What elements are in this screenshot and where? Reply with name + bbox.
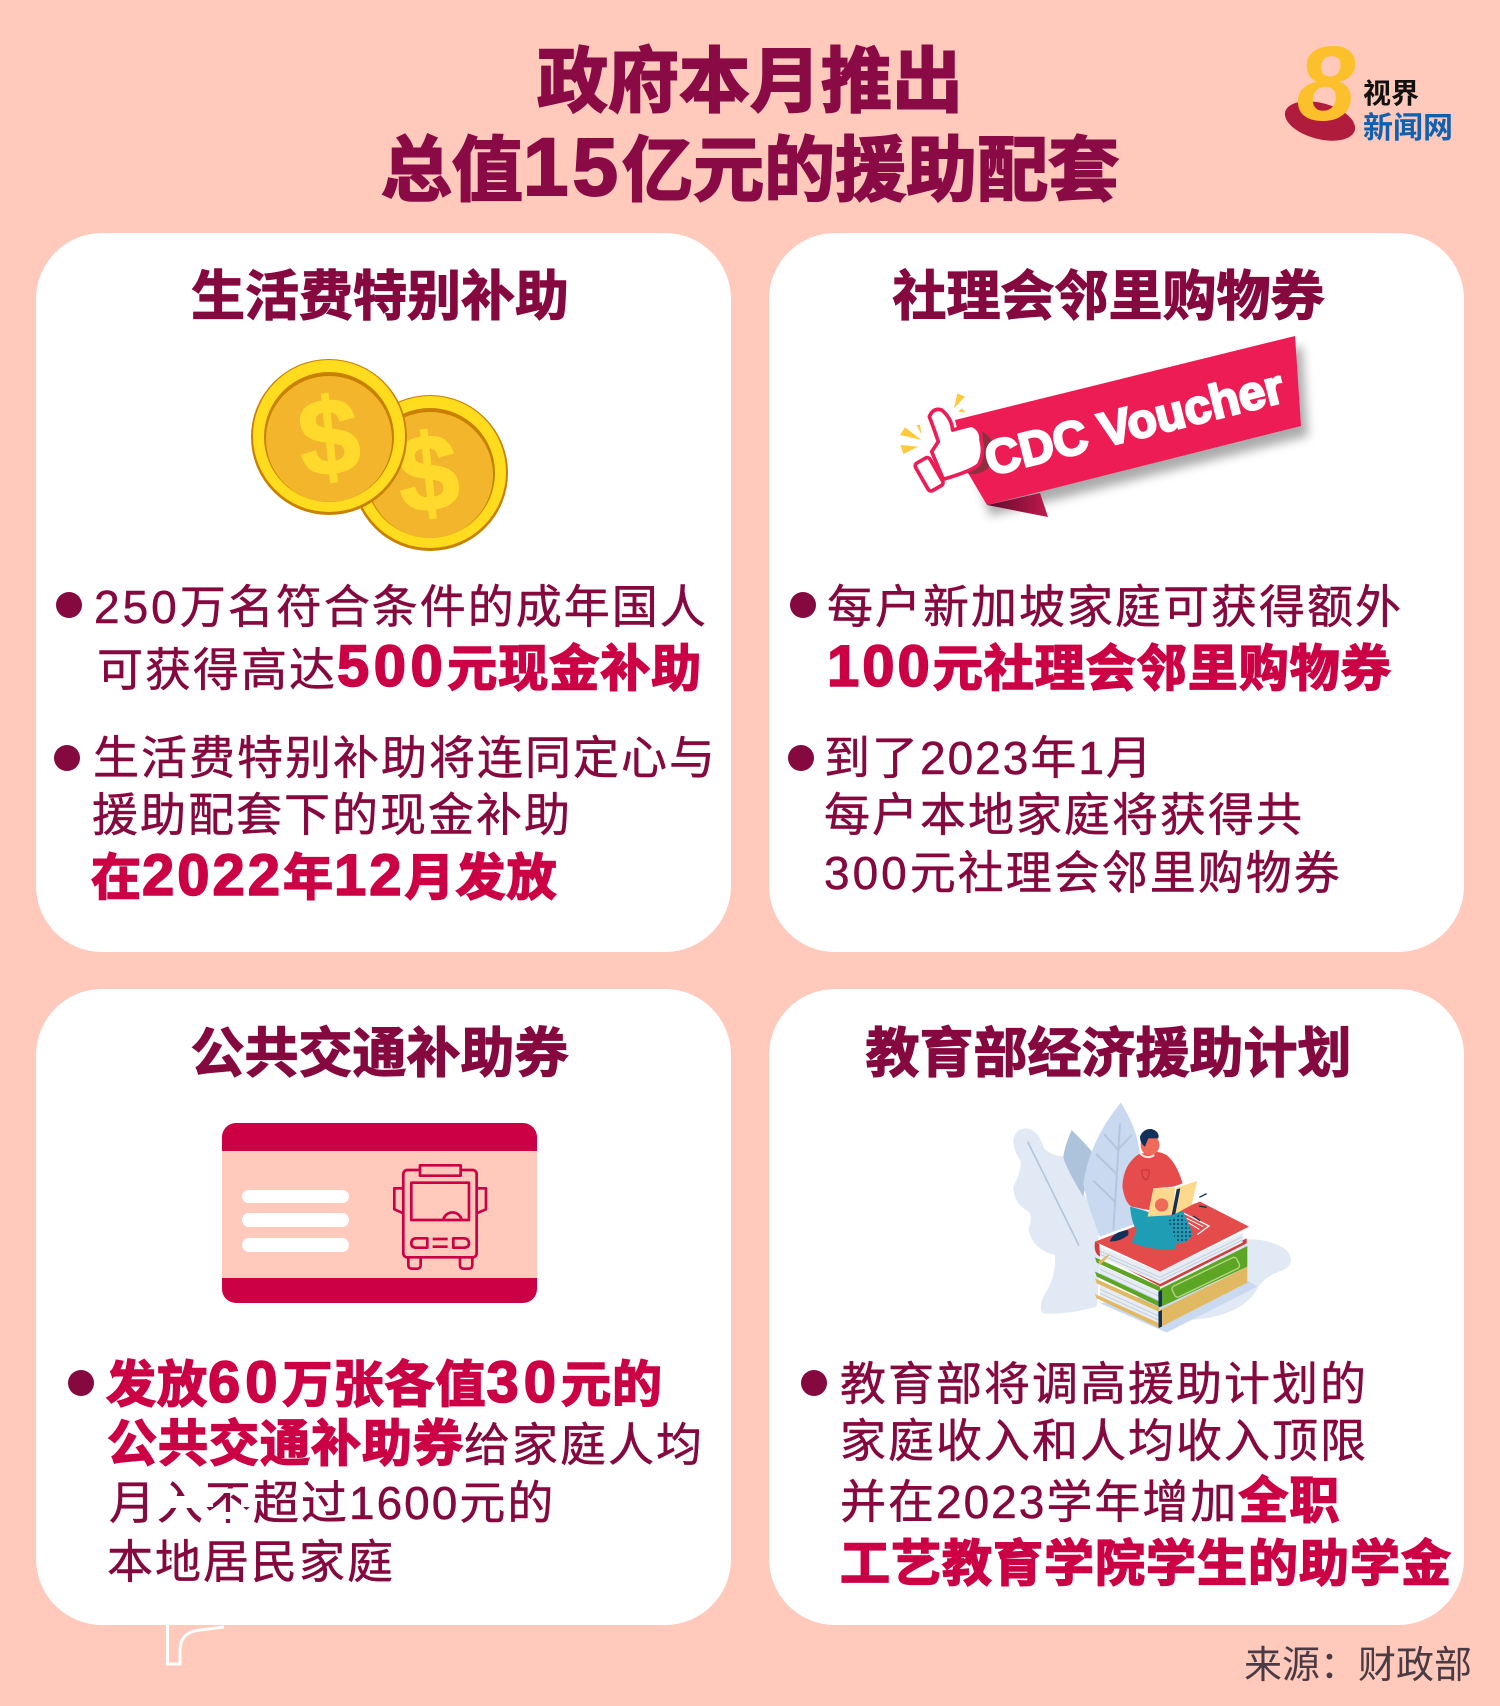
yellow book <box>1095 1267 1247 1328</box>
heading: 教育部经济援助计划 <box>866 1024 1352 1084</box>
bullet text: 工艺教育学院学生的助学金 <box>840 1536 1452 1592</box>
icon: gold coins <box>251 359 508 551</box>
bullet 2: 在2022年12月发放 <box>91 843 558 908</box>
bullet text: 教育部将调高援助计划的 <box>840 1358 1368 1410</box>
bullet text: 并在2023学年增加全职 <box>840 1473 1340 1529</box>
title <box>381 43 1120 213</box>
title: 政府本月推出 <box>537 43 963 122</box>
bullet 1 <box>790 581 1403 699</box>
bullet 2: 到了2023年1月 <box>824 732 1154 784</box>
panel: 社理会邻里购物券 <box>769 233 1464 952</box>
heading: 社理会邻里购物券 <box>892 267 1324 327</box>
icon: CDC voucher banner <box>900 336 1314 520</box>
icon: CDC voucher banner: CDC Voucher <box>980 361 1289 486</box>
bullet 1: 每户新加坡家庭可获得额外 <box>827 581 1403 633</box>
icon: bus ticket card <box>222 1123 537 1303</box>
bullet 1 <box>56 581 708 699</box>
logo: 8视界新闻网: 新闻网 <box>1363 112 1453 145</box>
erased strokes across the text <box>171 1488 249 1568</box>
bullet text: 公共交通补助券给家庭人均 <box>107 1416 704 1472</box>
bullet 2 <box>788 732 1342 899</box>
bullet 2 <box>54 732 717 908</box>
bullet 2: 生活费特别补助将连同定心与 <box>93 732 717 784</box>
bullet 1: 可获得高达500元现金补助 <box>97 634 702 699</box>
bullet 1: 250万名符合条件的成年国人 <box>94 581 708 633</box>
bullet text: 家庭收入和人均收入顶限 <box>840 1415 1368 1467</box>
bullet 2: 每户本地家庭将获得共 <box>824 789 1304 841</box>
title: 总值15亿元的援助配套 <box>381 122 1119 213</box>
source note: 来源：财政部 <box>1244 1645 1472 1687</box>
bullet text: 本地居民家庭 <box>107 1536 395 1588</box>
bullet text <box>801 1358 1452 1592</box>
icon: person reading on books <box>1013 1102 1291 1332</box>
bullet 2: 300元社理会邻里购物券 <box>824 847 1342 899</box>
icon: gold coins: $ <box>293 373 365 500</box>
logo: 8视界新闻网: 8 <box>1297 25 1356 143</box>
logo: 8视界新闻网: 视界 <box>1363 78 1419 109</box>
speech-bubble outline remnant <box>166 1625 224 1666</box>
panel: 公共交通补助券 <box>36 989 731 1625</box>
red book <box>1095 1202 1249 1287</box>
bullet text <box>68 1350 704 1588</box>
bullet text: 月入不超过1600元的 <box>109 1477 555 1529</box>
bullet text: 发放60万张各值30元的 <box>106 1350 663 1415</box>
panel: 教育部经济援助计划 <box>769 989 1464 1625</box>
heading: 公共交通补助券 <box>190 1024 568 1084</box>
bullet 1: 100元社理会邻里购物券 <box>827 634 1392 699</box>
green book <box>1095 1246 1247 1307</box>
logo: 8视界新闻网 <box>1284 25 1453 145</box>
bullet 2: 援助配套下的现金补助 <box>92 789 572 841</box>
heading: 生活费特别补助 <box>191 267 569 327</box>
icon: gold coins: $ <box>392 409 464 536</box>
panel: 生活费特别补助 <box>36 233 731 952</box>
